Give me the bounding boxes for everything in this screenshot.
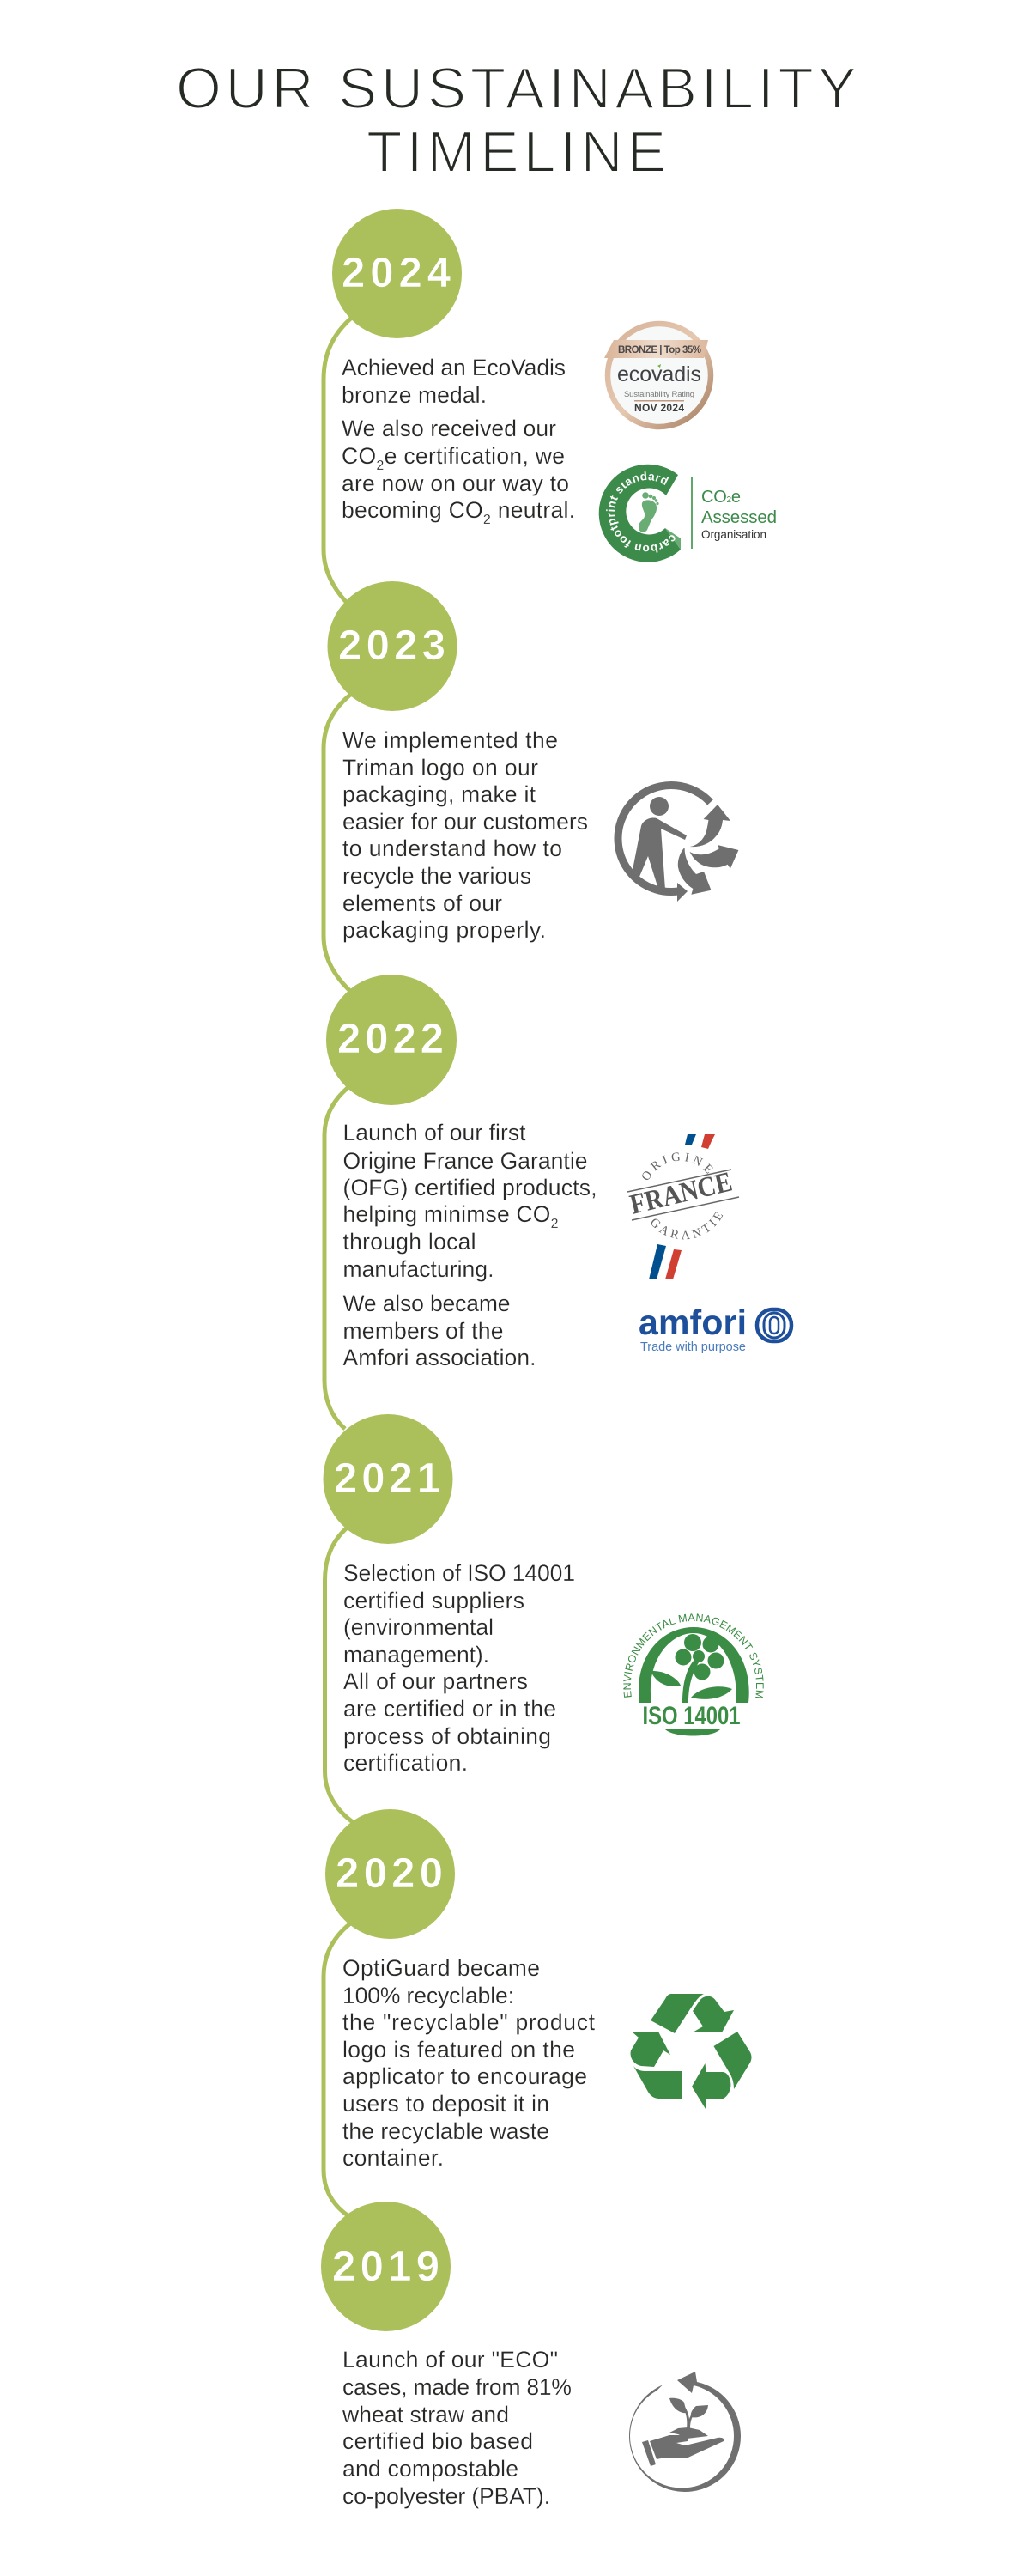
icon: hand holding seedling in circular arrow — [629, 2372, 741, 2492]
year badge 2020 — [325, 1809, 455, 1939]
text block 2020 — [342, 1955, 596, 2171]
text block 2022: Launch of our first — [343, 1120, 526, 1145]
text block 2023: packaging, make it — [342, 781, 536, 807]
icon: Origine France Garantie — [627, 1134, 740, 1279]
connector 2021 to 2020 — [324, 1525, 355, 1824]
panel: 2019 — [321, 2202, 741, 2509]
title: TIMELINE — [367, 119, 666, 185]
text block 2019: co-polyester (PBAT). — [342, 2483, 550, 2509]
year badge 2022 — [326, 975, 457, 1105]
text block 2024: CO — [342, 443, 376, 469]
text block 2024: e certification, we — [385, 443, 565, 469]
icon: Origine France Garantie: GARANTIE — [651, 1212, 723, 1240]
year badge 2019: 2019 — [332, 2244, 439, 2290]
year badge 2024 — [332, 209, 462, 338]
text block 2023: easier for our customers — [342, 809, 588, 835]
year badge 2024: 2024 — [342, 250, 451, 296]
text block 2023: Triman logo on our — [342, 755, 538, 781]
text block 2024: becoming CO — [342, 497, 483, 523]
text block 2019: Launch of our "ECO" — [342, 2347, 558, 2372]
text block 2021: certification. — [343, 1750, 468, 1776]
text block 2022: We also became — [343, 1291, 510, 1316]
text block 2020: the recyclable waste — [342, 2118, 549, 2144]
panel: 2022 — [323, 975, 793, 1431]
icon: recycling symbol — [631, 1994, 752, 2109]
year badge 2020: 2020 — [336, 1850, 443, 1897]
text block 2019: wheat straw and — [342, 2402, 509, 2427]
icon: carbon footprint standard: Organisation — [701, 528, 766, 541]
text block 2024: are now on our way to — [342, 471, 569, 496]
panel: 2024 — [321, 209, 777, 603]
panel: 2021 — [323, 1414, 764, 1823]
text block 2024: Achieved an EcoVadis — [342, 355, 566, 380]
icon: ISO 14001 logo: ISO 14001 — [642, 1702, 740, 1730]
text block 2022: through local — [343, 1229, 476, 1255]
icon: Origine France Garantie: ORIGINE — [642, 1152, 713, 1180]
icon: EcoVadis bronze medal — [604, 324, 711, 427]
text block 2021: process of obtaining — [343, 1723, 551, 1749]
icon: Triman logo — [618, 786, 738, 902]
text block 2020: 100% recyclable: — [342, 1983, 514, 2008]
text block 2023: We implemented the — [342, 727, 558, 753]
icon: amfori logo: amfori — [639, 1303, 747, 1342]
text block 2020: logo is featured on the — [342, 2037, 575, 2063]
text block 2023: to understand how to — [342, 835, 562, 861]
title — [176, 56, 857, 185]
text block 2020: container. — [342, 2145, 444, 2171]
text block 2021: (environmental — [343, 1614, 494, 1640]
text block 2022: manufacturing. — [343, 1256, 494, 1282]
text block 2021: are certified or in the — [343, 1696, 556, 1722]
year badge 2019 — [321, 2202, 451, 2331]
text block 2021: management). — [343, 1642, 489, 1668]
icon: amfori logo: Trade with purpose — [640, 1340, 746, 1354]
text block 2020: applicator to encourage — [342, 2063, 587, 2089]
text block 2019 — [342, 2347, 572, 2509]
connector 2022 to 2021 — [324, 1084, 353, 1429]
icon: ISO 14001 logo — [623, 1613, 764, 1736]
year badge 2022: 2022 — [337, 1016, 444, 1062]
icon: EcoVadis bronze medal: Sustainability Rating — [624, 390, 694, 399]
text block 2019: cases, made from 81% — [342, 2374, 572, 2400]
text block 2021: certified suppliers — [343, 1588, 524, 1613]
title: OUR SUSTAINABILITY — [176, 56, 857, 121]
text block 2020: the "recyclable" product — [342, 2009, 596, 2035]
text block 2022: Origine France Garantie — [343, 1148, 587, 1174]
text block 2024: 2 — [376, 459, 384, 473]
year badge 2021 — [323, 1414, 453, 1544]
text block 2023 — [342, 727, 588, 943]
icon: carbon footprint standard: carbon footprint standard — [606, 471, 676, 553]
year badge 2023: 2023 — [338, 623, 445, 669]
text block 2020: users to deposit it in — [342, 2091, 549, 2117]
text block 2022: (OFG) certified products, — [343, 1175, 597, 1200]
text block 2022: 2 — [551, 1217, 559, 1231]
icon: carbon footprint standard: Assessed — [701, 507, 777, 527]
text block 2022: Amfori association. — [343, 1345, 536, 1370]
text block 2023: recycle the various — [342, 863, 531, 889]
icon: ISO 14001 logo: ENVIRONMENTAL MANAGEMENT SYSTEM — [623, 1613, 764, 1698]
connector 2024 to 2023 — [324, 316, 354, 606]
text block 2024: neutral. — [491, 497, 575, 523]
text block 2022: members of the — [343, 1318, 503, 1344]
icon: carbon footprint standard: CO2e — [701, 488, 741, 507]
text block 2019: certified bio based — [342, 2428, 533, 2454]
text block 2020: OptiGuard became — [342, 1955, 540, 1981]
text block 2019: and compostable — [342, 2456, 518, 2482]
text block 2023: packaging properly. — [342, 917, 546, 943]
text block 2022 — [343, 1120, 597, 1370]
icon: EcoVadis bronze medal: BRONZE | Top 35% — [618, 345, 701, 355]
icon: amfori logo — [639, 1303, 791, 1354]
text block 2021 — [343, 1560, 575, 1776]
icon: carbon footprint standard — [599, 464, 777, 562]
text block 2024: We also received our — [342, 416, 556, 441]
icon: EcoVadis bronze medal: ecovadis — [617, 362, 701, 386]
panel: 2020 — [324, 1809, 752, 2217]
connector 2020 to 2019 — [324, 1922, 353, 2217]
year badge 2021: 2021 — [334, 1455, 440, 1502]
icon: EcoVadis bronze medal: NOV 2024 — [634, 402, 684, 414]
text block 2021: Selection of ISO 14001 — [343, 1560, 575, 1586]
text block 2022: helping minimse CO — [343, 1201, 550, 1227]
text block 2023: elements of our — [342, 890, 502, 916]
icon: Origine France Garantie: FRANCE — [627, 1167, 736, 1221]
text block 2021: All of our partners — [343, 1668, 528, 1694]
text block 2024: bronze medal. — [342, 382, 487, 408]
panel: 2023 — [324, 581, 738, 993]
text block 2024: 2 — [483, 513, 491, 527]
year badge 2023 — [328, 581, 457, 711]
text block 2024 — [342, 355, 575, 527]
connector 2023 to 2022 — [324, 692, 354, 993]
